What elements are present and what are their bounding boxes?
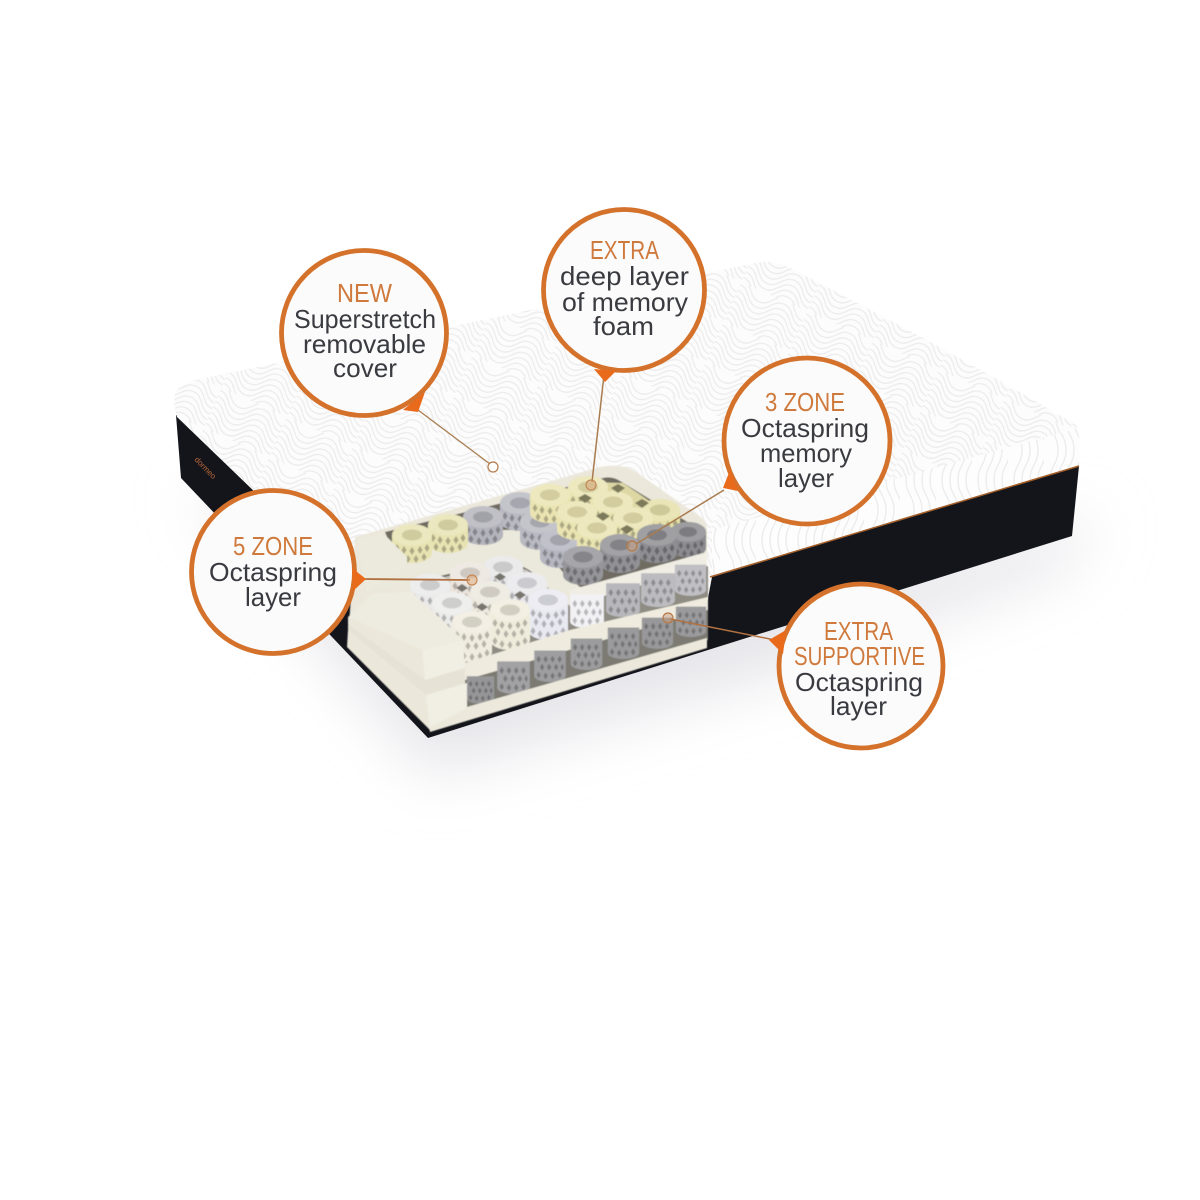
pointer tail bbox=[403, 392, 425, 412]
callout text bbox=[560, 235, 689, 341]
lower block side face bbox=[347, 630, 430, 730]
top block side face bbox=[348, 617, 425, 680]
callout: new cover bbox=[282, 250, 498, 472]
brand label on side: dormeo bbox=[193, 455, 218, 481]
bottom foam slab bbox=[428, 638, 707, 732]
callout: memory foam bbox=[544, 210, 704, 490]
callout text: EXTRA bbox=[590, 235, 660, 265]
pointer marker bbox=[663, 613, 673, 623]
gaps between yellow springs bbox=[578, 484, 649, 534]
callout text: Octaspring bbox=[209, 557, 337, 587]
pointer marker bbox=[467, 575, 477, 585]
callout text bbox=[209, 531, 337, 612]
callout text: SUPPORTIVE bbox=[794, 641, 925, 671]
pointer marker bbox=[586, 480, 596, 490]
pointer line bbox=[362, 579, 470, 580]
callout: 5 zone bbox=[192, 490, 477, 654]
pointer line bbox=[592, 375, 604, 482]
floor shadow bbox=[190, 490, 1100, 775]
callout text: Octaspring bbox=[795, 667, 923, 697]
mattress bbox=[174, 262, 1079, 738]
bottom layer backing bbox=[465, 610, 708, 712]
circle bbox=[544, 210, 704, 370]
callout text: NEW bbox=[337, 278, 392, 308]
mattress black base bbox=[176, 415, 1079, 738]
middle layer backing bbox=[410, 563, 708, 668]
upper foam slab bbox=[367, 530, 707, 606]
top block upper face bbox=[348, 592, 463, 650]
callout: 3 zone bbox=[627, 358, 890, 551]
pointer line bbox=[670, 619, 775, 640]
pointer marker bbox=[627, 541, 637, 551]
circle bbox=[779, 584, 943, 748]
callout text: layer bbox=[830, 691, 887, 721]
gaps between white springs bbox=[456, 573, 526, 611]
callout text bbox=[294, 278, 436, 383]
callout: extra supportive bbox=[663, 584, 943, 748]
middle foam slab bbox=[465, 597, 708, 680]
callout text: 5 ZONE bbox=[233, 531, 313, 561]
callout text: removable bbox=[303, 329, 426, 359]
callout text: cover bbox=[333, 353, 397, 383]
middle strip bbox=[348, 624, 465, 695]
circle bbox=[282, 250, 446, 416]
orange piping bbox=[710, 466, 1079, 577]
callout text bbox=[794, 616, 925, 721]
callout text: foam bbox=[593, 311, 654, 341]
middle foam strip right bbox=[570, 552, 707, 606]
middle layer top springs bbox=[410, 556, 568, 662]
cut back rim bbox=[348, 466, 707, 730]
top layer grey springs bbox=[463, 492, 580, 568]
pointer tail bbox=[769, 630, 786, 654]
cut inner cavity bbox=[385, 477, 704, 610]
pointer tail bbox=[723, 470, 738, 491]
callout text: 3 ZONE bbox=[765, 387, 845, 417]
callout text: Octaspring bbox=[741, 413, 869, 443]
cutaway showing inner layers bbox=[347, 466, 708, 732]
callout text: layer bbox=[245, 582, 301, 612]
pointer tail bbox=[352, 568, 366, 591]
callout text: EXTRA bbox=[824, 616, 894, 646]
circle bbox=[724, 358, 890, 524]
middle layer spring bodies bbox=[570, 565, 706, 628]
bottom layer spring bodies bbox=[467, 607, 706, 704]
left foam blocks bbox=[347, 592, 467, 730]
pointer marker bbox=[488, 462, 498, 472]
upper left foam block bbox=[357, 533, 407, 593]
callout text: memory bbox=[760, 438, 852, 468]
circle bbox=[192, 490, 354, 654]
callout text: deep layer bbox=[560, 261, 689, 291]
callout text bbox=[741, 387, 869, 493]
white spring backing bbox=[412, 563, 567, 640]
callout text: Superstretch bbox=[294, 304, 436, 334]
top layer yellow springs left bbox=[392, 514, 468, 563]
pointer line bbox=[418, 410, 490, 464]
lower block front face bbox=[426, 683, 467, 727]
pointer tail bbox=[594, 369, 616, 382]
cover side band bbox=[712, 428, 1079, 577]
yellow backing bbox=[537, 482, 673, 543]
callout text: of memory bbox=[562, 287, 688, 317]
callout text: layer bbox=[778, 463, 834, 493]
top layer dark grey springs bbox=[563, 522, 706, 585]
top block front face bbox=[422, 640, 465, 680]
top layer yellow spring grid bbox=[530, 476, 680, 556]
pointer line bbox=[636, 490, 724, 544]
mattress cover bbox=[174, 262, 1079, 640]
